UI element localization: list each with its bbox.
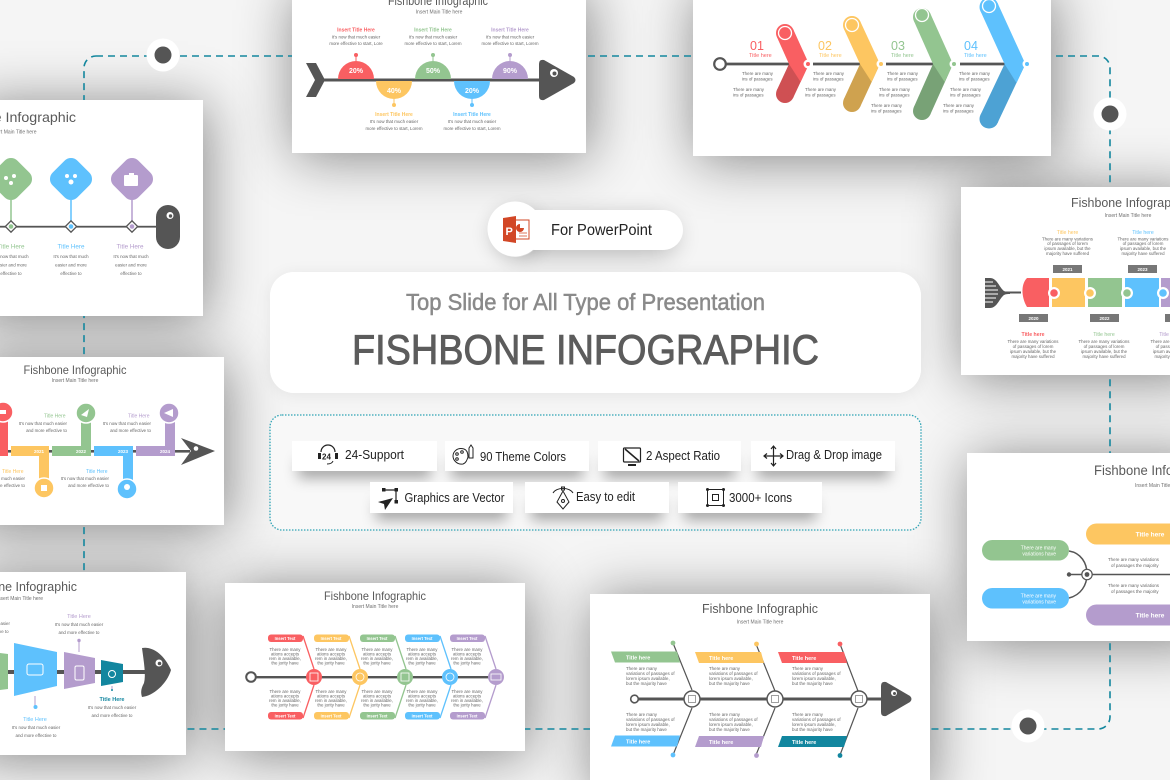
spine [0, 450, 190, 453]
panel: slide bottom classic fishbone: Title here [792, 740, 816, 746]
rib captions: There are many [792, 666, 824, 671]
bone captions: ations accepts [408, 694, 437, 698]
rib captions: variations of passages of [792, 717, 841, 722]
panel: slide top centre semicircle fishbone: more effective to start, Lore [329, 41, 383, 46]
trapezoid captions [35, 641, 112, 707]
pill labels [1021, 546, 1056, 606]
bubbles [338, 61, 374, 79]
panel: slide left stepped timeline: Insert Main Title here [52, 378, 99, 384]
bone captions: ations accepts [453, 652, 482, 656]
chevron captions: There are many [813, 71, 845, 76]
chevron captions: There are many [887, 71, 919, 76]
chevron captions: ins of passages [943, 108, 974, 114]
feature: Graphics are Vector: Graphics are Vector [404, 490, 505, 505]
panel: slide right puzzle fishbone: ipsum available, but the [1044, 246, 1091, 251]
panel: slide right puzzle fishbone: 2022 [1099, 316, 1110, 321]
panel: slide right puzzle fishbone: ipsum available, but the [1010, 349, 1057, 354]
bone captions: rem in available, [269, 656, 301, 661]
panel: slide bottom classic fishbone: Title here [626, 656, 650, 662]
panel: slide top right chevrons: Title here [964, 53, 987, 59]
panel: slide left trapezoid fish: and more effective to [16, 733, 57, 738]
slide title: Fishbone Infographic [24, 363, 126, 377]
panel: slide top centre semicircle fishbone: 20% [349, 68, 364, 75]
spine [0, 226, 160, 228]
spine nodes [684, 691, 867, 707]
chevron 01 [776, 24, 809, 103]
panel: slide left trapezoid fish: Title Here [100, 697, 124, 703]
rib captions: There are many [709, 712, 741, 717]
icon: monitor [624, 448, 640, 465]
panel: slide left trapezoid fish: and more effective to [92, 713, 133, 718]
panel: slide right puzzle fishbone: There are many variations [1007, 339, 1059, 344]
bone labels: Insert Text [321, 636, 342, 641]
panel: slide right pill fishbone: Title here [1136, 612, 1165, 620]
panel: slide left stepped timeline: and more effective to [68, 483, 110, 488]
chevron 02 [843, 16, 880, 112]
spine [638, 698, 888, 700]
purple bones [450, 634, 504, 720]
round icons [0, 402, 179, 499]
bone captions: There are many [362, 647, 393, 652]
panel: slide bottom six-bone fishbone [225, 583, 525, 751]
bone captions: ations accepts [408, 652, 437, 656]
bone labels: Insert Text [275, 714, 296, 718]
bone captions: There are many [406, 689, 438, 694]
bone labels: Insert Text [321, 714, 342, 718]
rib captions: There are many [626, 712, 658, 717]
bone captions: the jority have [363, 702, 391, 708]
chevron icons and dots [778, 0, 996, 40]
rib captions [626, 666, 841, 732]
heading panel [270, 272, 921, 393]
icon: pen tool [553, 487, 573, 509]
rib captions: variations of passages of [626, 717, 675, 722]
chevron captions: ins of passages [805, 92, 836, 98]
panel: slide right puzzle fishbone: of passages of lorem [1123, 241, 1164, 246]
panel: slide left trapezoid fish: It's now that much easier [12, 725, 61, 730]
rib captions: lorem ipsum available, [792, 676, 836, 681]
feature: 90 Theme Colors [445, 441, 589, 471]
arrow head [181, 438, 215, 465]
panel: slide left trapezoid fish: Title Here [23, 717, 47, 723]
feature: Drag & Drop image: Drag & Drop image [786, 447, 882, 462]
captions: Title Here [86, 469, 108, 475]
bubble captions: Insert Title Here [491, 28, 529, 34]
panel: slide left diamonds: effective to [0, 271, 22, 276]
rib captions: variations of passages of [709, 717, 758, 722]
captions [0, 244, 144, 250]
panel: slide right pill fishbone: Title here [1136, 532, 1165, 538]
pill labels: There are many [1021, 594, 1056, 600]
panel: slide top right chevrons: Title here [749, 53, 772, 59]
panel: slide bottom classic fishbone [590, 594, 930, 780]
rib captions: lorem ipsum available, [709, 722, 753, 727]
panel: slide top centre semicircle fishbone: more effective to start, Lorem [365, 126, 423, 131]
node: bottom [1012, 710, 1044, 742]
panel: slide left trapezoid fish [0, 572, 186, 755]
panel: slide right puzzle fishbone: 2021 [1062, 267, 1073, 272]
panel: slide left stepped timeline: 2023 [118, 449, 129, 454]
dashed connector line [84, 56, 1110, 729]
feature: Graphics are Vector [370, 482, 513, 513]
bone captions: rem in available, [315, 698, 347, 703]
panel: slide left trapezoid fish: and more effective to [59, 630, 100, 635]
bone captions: ations accepts [363, 652, 392, 656]
timeline spine [726, 63, 1007, 65]
panel: slide left diamonds: effective to [120, 271, 142, 276]
rib captions: lorem ipsum available, [709, 676, 753, 681]
panel: slide top centre semicircle fishbone: It's now that much easier [332, 34, 381, 40]
panel: slide left stepped timeline: It's now that much easier [103, 421, 152, 426]
panel: slide top centre semicircle fishbone: It's now that much easier [370, 119, 419, 124]
chevron 03 [913, 8, 953, 120]
feature: Easy to edit [525, 482, 669, 513]
captions: Title Here [57, 244, 85, 250]
panel: slide top right chevrons: Title here [819, 53, 842, 59]
bone captions: There are many [316, 689, 347, 694]
feature: 2 Aspect Ratio: 2 Aspect Ratio [646, 448, 720, 463]
puzzle pieces [1022, 278, 1049, 307]
panel: slide right puzzle fishbone: There are many variations [1078, 339, 1130, 344]
pills [982, 540, 1069, 560]
panel: slide left trapezoid fish: It's now that much easier [55, 622, 104, 627]
icon: selection frame [708, 490, 724, 506]
feature: Drag & Drop image [751, 441, 895, 471]
panel: slide right puzzle fishbone: majority have suffered [1046, 251, 1090, 256]
bone captions: the jority have [453, 702, 481, 708]
chevron numbers [750, 39, 978, 53]
yellow bones [314, 634, 368, 720]
bone captions: the jority have [317, 702, 345, 708]
bone captions: ations accepts [271, 652, 300, 656]
panel: slide right puzzle fishbone: There are many variations [1042, 236, 1094, 242]
diamond icons [4, 173, 138, 186]
fish tail [306, 63, 325, 97]
captions: There are many variations [1108, 583, 1160, 588]
icon: vector cursor [378, 488, 398, 510]
rib captions: but the majority have [709, 727, 750, 732]
captions [2, 414, 150, 475]
panel: slide left diamonds: It's now that much [53, 254, 89, 259]
bone captions: the jority have [271, 702, 299, 708]
fish spine [323, 78, 543, 82]
node: top left [146, 38, 180, 72]
captions: Title Here [116, 244, 144, 250]
bone captions: ations accepts [271, 694, 300, 698]
rib captions: but the majority have [792, 681, 833, 686]
chevron numbers: 03 [891, 39, 905, 53]
captions: of passages the majority [1111, 589, 1159, 594]
pill labels: There are many [1021, 546, 1056, 552]
rib captions: but the majority have [626, 681, 667, 686]
bone captions: the jority have [453, 660, 481, 666]
bubble captions: Insert Title Here [414, 28, 452, 34]
chevron captions: There are many [733, 87, 765, 92]
bone captions: rem in available, [406, 656, 438, 661]
bone captions: ations accepts [317, 694, 346, 698]
panel: slide right puzzle fishbone: of passages of lorem [1047, 241, 1088, 246]
panel: slide bottom classic fishbone: Insert Main Title here [737, 620, 784, 626]
year tags [1019, 265, 1170, 322]
panel: slide bottom six-bone fishbone: Insert Main Title here [352, 604, 399, 610]
bubble captions: Insert Title Here [453, 112, 491, 118]
captions: Title Here [44, 414, 66, 420]
panel: slide left stepped timeline: It's now that much easier [61, 476, 110, 481]
panel: slide right puzzle fishbone: ipsum available, but the [1081, 349, 1128, 354]
bone captions: There are many [270, 647, 301, 652]
panel: slide left diamonds [0, 100, 203, 316]
icon: PowerPoint logo: P [506, 226, 513, 238]
panel: slide right puzzle fishbone: ipsum available, but the [1120, 246, 1167, 251]
chevron captions: There are many [805, 87, 837, 92]
bone captions: rem in available, [315, 656, 347, 661]
panel: slide top centre semicircle fishbone: It's now that much easier [409, 34, 458, 40]
feature: 24-Support: 24-Support [345, 447, 404, 462]
bone captions: ations accepts [317, 652, 346, 656]
panel: slide right puzzle fishbone: majority have suffered [1082, 354, 1126, 359]
panel: slide right puzzle fishbone: majority have suffered [1011, 354, 1055, 359]
panel: slide left trapezoid fish: It's now that much easier [88, 705, 137, 710]
spine [0, 670, 146, 674]
node: right [1094, 98, 1126, 130]
icon: PowerPoint logo [503, 216, 529, 243]
rib captions: but the majority have [709, 681, 750, 686]
panel: slide top centre semicircle fishbone: more effective to start, Lorem [481, 41, 539, 46]
panel: slide left stepped timeline: It's now that much easier [19, 421, 68, 426]
bone captions [269, 647, 483, 708]
panel: slide left stepped timeline [0, 357, 224, 525]
panel: slide right puzzle fishbone: Insert Main Title here [1105, 213, 1152, 219]
blue bones [405, 634, 458, 720]
slide title: Fishbone Infographic [702, 601, 818, 616]
panel: slide left diamonds: easier and more [55, 262, 87, 268]
chevron captions: ins of passages [871, 108, 902, 114]
chevron captions: There are many [879, 87, 911, 92]
bubble captions: Insert Title Here [337, 28, 375, 34]
icon: palette [453, 445, 473, 464]
captions: Title Here [2, 469, 24, 475]
bone labels: Insert Text [367, 714, 388, 718]
chevron captions: There are many [943, 103, 975, 108]
bone captions: There are many [316, 647, 347, 652]
panel: slide right puzzle fishbone: of passages of lorem [1013, 344, 1054, 349]
bone captions: the jority have [271, 660, 299, 666]
icon: move arrows [764, 446, 783, 466]
subtitle: Top Slide for All Type of Presentation [406, 289, 765, 315]
chevron captions: There are many [959, 71, 991, 76]
feature: 3000+ Icons: 3000+ Icons [729, 490, 792, 505]
panel: slide left diamonds: effective to [60, 271, 82, 276]
year blocks [0, 446, 8, 456]
panel: slide left stepped timeline: 2021 [34, 449, 45, 454]
panel: slide right puzzle fishbone: 2020 [1028, 316, 1039, 321]
icon: headset [318, 445, 338, 464]
panel: slide left diamonds: easier and more [115, 262, 147, 268]
rib tags [611, 652, 680, 662]
bone captions: the jority have [408, 660, 436, 666]
bone labels: Insert Text [412, 714, 433, 718]
panel: slide top centre semicircle fishbone: It's now that much easier [486, 34, 535, 40]
panel: slide left stepped timeline: 2022 [76, 449, 87, 454]
chevron captions: ins of passages [959, 76, 990, 82]
bone labels: Insert Text [457, 714, 478, 718]
chevron captions: ins of passages [742, 76, 773, 82]
bone labels: Insert Text [412, 636, 433, 641]
rib captions: variations of passages of [709, 671, 758, 676]
red bones [268, 634, 322, 720]
captions: There are many variations [1108, 557, 1160, 562]
captions: Title here [1132, 230, 1154, 236]
panel: slide left diamonds: It's now that much [113, 254, 149, 259]
panel: slide bottom classic fishbone: Title here [709, 740, 733, 746]
bone labels: Insert Text [275, 636, 296, 641]
bone captions: rem in available, [361, 698, 393, 703]
title: FISHBONE INFOGRAPHIC [352, 326, 819, 373]
bone captions: ations accepts [453, 694, 482, 698]
chevron captions: There are many [871, 103, 903, 108]
dotted features box [270, 415, 921, 530]
captions: Title here [1022, 332, 1045, 338]
panel: slide top centre semicircle fishbone: more effective to start, Lorem [404, 41, 462, 46]
rib end dots [671, 641, 675, 645]
fish head capsule [156, 205, 180, 249]
panel: slide top right chevrons: Title here [891, 53, 914, 59]
panel: slide right pill fishbone [967, 453, 1170, 641]
bone captions: There are many [362, 689, 393, 694]
diamonds [0, 154, 36, 204]
panel: slide right puzzle fishbone [961, 187, 1170, 375]
rib captions: variations of passages of [792, 671, 841, 676]
bone captions: the jority have [408, 702, 436, 708]
chevron captions: ins of passages [879, 92, 910, 98]
panel: slide left stepped timeline: 2024 [160, 449, 171, 454]
spine [256, 676, 496, 678]
rib captions: lorem ipsum available, [626, 722, 670, 727]
panel: slide bottom classic fishbone: Title here [709, 656, 733, 662]
rib captions: lorem ipsum available, [626, 676, 670, 681]
bone labels: Insert Text [367, 636, 388, 641]
bone labels [275, 636, 478, 718]
connecting curves [1069, 551, 1170, 598]
bone captions: ations accepts [363, 694, 392, 698]
badge: For PowerPoint [488, 202, 683, 256]
captions: Title here [1093, 332, 1115, 338]
bone captions: the jority have [363, 660, 391, 666]
bone captions: rem in available, [361, 656, 393, 661]
panel: slide top centre semicircle fishbone: 20% [465, 88, 480, 95]
panel: slide left trapezoid fish: Title Here [67, 614, 91, 620]
fish head [881, 682, 912, 716]
panel: slide top centre semicircle fishbone: 50% [426, 68, 441, 75]
panel: slide top centre semicircle fishbone: It's now that much easier [448, 119, 497, 124]
pill labels: variations have [1022, 600, 1056, 606]
rib captions: There are many [626, 666, 658, 671]
panel: slide top centre semicircle fishbone: more effective to start, Lorem [443, 126, 501, 131]
feature: Easy to edit: Easy to edit [576, 489, 635, 504]
bone captions: There are many [406, 647, 438, 652]
feature: 90 Theme Colors: 90 Theme Colors [480, 449, 566, 464]
badge: For PowerPoint: For PowerPoint [551, 222, 653, 239]
panel: slide left stepped timeline: and more effective to [110, 428, 152, 433]
bone captions: There are many [270, 689, 301, 694]
bone captions: rem in available, [269, 698, 301, 703]
feature: 3000+ Icons [678, 482, 822, 513]
captions [1022, 230, 1170, 338]
panel: slide top centre semicircle fishbone: 40% [387, 88, 402, 95]
chevron captions: ins of passages [950, 92, 981, 98]
chevron captions: ins of passages [887, 76, 918, 82]
bone captions: rem in available, [406, 698, 438, 703]
fish tail comb [985, 278, 1010, 308]
panel: slide bottom classic fishbone: Title here [626, 740, 650, 746]
bone captions: rem in available, [451, 656, 483, 661]
panel: slide left stepped timeline: and more effective to [26, 428, 68, 433]
rib captions: There are many [792, 712, 824, 717]
chevron numbers: 01 [750, 39, 764, 53]
captions [1108, 557, 1160, 594]
bone captions: the jority have [317, 660, 345, 666]
panel: slide top centre semicircle fishbone: Insert Main Title here [416, 10, 463, 16]
rib captions: There are many [709, 666, 741, 671]
bubble captions: Insert Title Here [375, 112, 413, 118]
chevron captions: There are many [950, 87, 982, 92]
bone captions: There are many [452, 647, 483, 652]
chevron captions: ins of passages [813, 76, 844, 82]
trapezoids [0, 653, 8, 690]
fish head [141, 648, 171, 697]
rib captions: lorem ipsum available, [792, 722, 836, 727]
chevron numbers: 04 [964, 39, 978, 53]
rib captions: but the majority have [626, 727, 667, 732]
chevron captions [733, 71, 991, 114]
bone captions: rem in available, [451, 698, 483, 703]
fish head [539, 60, 576, 100]
rib captions: but the majority have [792, 727, 833, 732]
slide title: Fishbone Infographic [324, 589, 426, 603]
bubble captions [337, 28, 529, 118]
green bones [360, 634, 413, 720]
chevron captions: ins of passages [733, 92, 764, 98]
icon: headset: 24 [322, 452, 331, 462]
panel: slide top centre semicircle fishbone [292, 0, 586, 153]
captions: Title here [1057, 230, 1078, 236]
panel: slide right puzzle fishbone: of passages of lorem [1084, 344, 1125, 349]
chevron numbers: 02 [818, 39, 832, 53]
panel: slide right puzzle fishbone: There are many variations [1117, 236, 1169, 242]
captions: of passages the majority [1111, 563, 1159, 568]
bone labels: Insert Text [457, 636, 478, 641]
captions: Title Here [128, 414, 150, 420]
pill labels: variations have [1022, 552, 1056, 558]
rib captions: variations of passages of [626, 671, 675, 676]
panel: slide top centre semicircle fishbone: 90% [503, 68, 518, 75]
chevron 04 [980, 0, 1025, 128]
chevron captions: There are many [742, 71, 774, 76]
feature: 24-Support [292, 441, 437, 471]
panel: slide bottom classic fishbone: Title here [792, 656, 816, 662]
panel: slide right puzzle fishbone: 2023 [1137, 267, 1148, 272]
panel: slide right puzzle fishbone: majority have suffered [1121, 251, 1165, 256]
bone captions: There are many [452, 689, 483, 694]
puzzle joints [1048, 287, 1060, 299]
panel: slide top right chevrons [693, 0, 1051, 156]
feature: 2 Aspect Ratio [598, 441, 741, 471]
ribs [673, 643, 858, 755]
trapezoid icons [27, 664, 116, 680]
